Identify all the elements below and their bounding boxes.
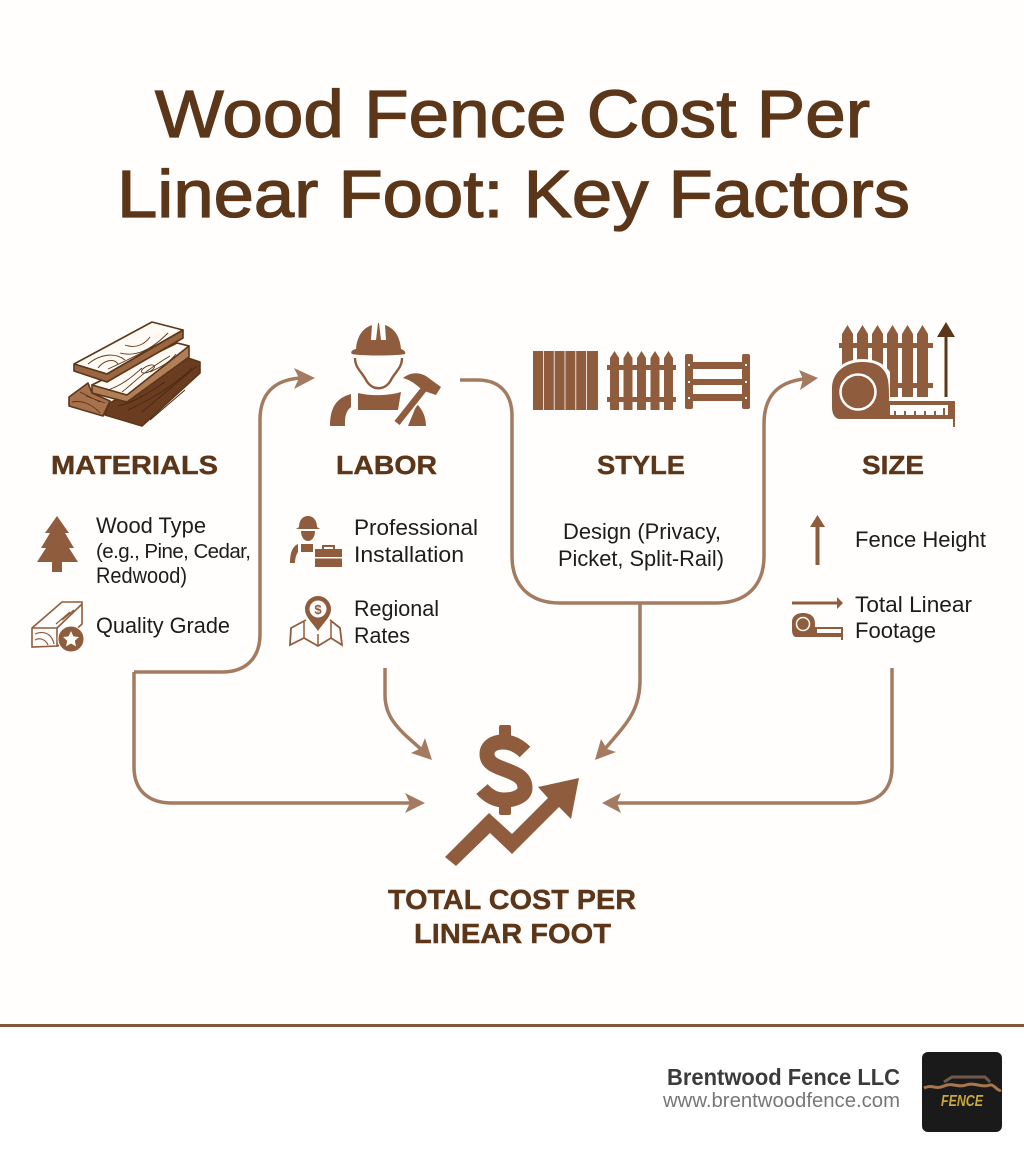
text: design: [558, 519, 724, 571]
text: wood type: Wood Type: [96, 513, 206, 538]
text: professional installation: [354, 515, 478, 567]
icon: stacked lumber: [69, 322, 200, 426]
arrow: labor to total cost: [385, 668, 432, 760]
text: total linear footage: [855, 592, 972, 643]
icon: privacy fence: [533, 351, 598, 410]
panel: total cost: [388, 725, 636, 949]
icon: linear tape arrow: [792, 597, 843, 640]
heading: labor: LABOR: [336, 450, 437, 480]
icon: pine tree: [37, 516, 78, 572]
heading: materials: MATERIALS: [51, 450, 218, 480]
icon: worker with hard hat and hammer: [330, 323, 441, 426]
title: Linear Foot: Key Factors: [117, 157, 910, 232]
logo: [922, 1052, 1002, 1132]
arrow: labor to style to size: [460, 370, 818, 603]
icon: fence with tape measure: [829, 322, 955, 427]
arrow: style to total cost: [595, 603, 640, 760]
panel: labor: [290, 323, 478, 648]
text: regional rates: [354, 596, 439, 648]
icon: map with dollar pin: [290, 596, 342, 646]
heading: size: SIZE: [862, 450, 924, 480]
title: [117, 77, 910, 232]
text: wood type: (e.g., Pine, Cedar,: [96, 540, 251, 563]
text: design: Design (Privacy,: [563, 519, 721, 544]
text: total cost per linear foot: TOTAL COST PER: [388, 884, 636, 915]
text: wood type: [96, 513, 251, 588]
icon: map with dollar pin: $: [314, 602, 322, 617]
footer: [0, 1024, 1024, 1154]
text: regional rates: Rates: [354, 623, 410, 648]
panel: materials: [32, 322, 251, 652]
icon: lumber beam with star badge: [32, 602, 84, 652]
text: professional installation: Installation: [354, 542, 464, 567]
text: design: Picket, Split-Rail): [558, 546, 724, 571]
text: quality grade: Quality Grade: [96, 613, 230, 638]
arrow: size to total cost: [602, 668, 892, 813]
text: total cost per linear foot: [388, 884, 636, 949]
heading: style: STYLE: [597, 450, 685, 480]
text: total linear footage: Total Linear: [855, 592, 972, 617]
arrow: materials to labor and total cost: [134, 368, 425, 813]
icon: height arrow: [810, 515, 825, 565]
text: fence height: Fence Height: [855, 527, 986, 552]
text: professional installation: Professional: [354, 515, 478, 540]
icon: dollar with rising arrow: [445, 725, 579, 866]
brand name: Brentwood Fence LLC: [667, 1064, 900, 1090]
panel: size: [792, 322, 986, 643]
text: wood type: Redwood): [96, 563, 187, 588]
text: total cost per linear foot: LINEAR FOOT: [414, 918, 611, 949]
text: total linear footage: Footage: [855, 618, 936, 643]
panel: style: [533, 351, 750, 571]
logo: FENCE: [941, 1093, 984, 1110]
title: Wood Fence Cost Per: [155, 77, 870, 152]
icon: split-rail fence: [685, 354, 750, 409]
website: www.brentwoodfence.com: [662, 1090, 900, 1112]
text: regional rates: Regional: [354, 596, 439, 621]
icon: worker with toolbox: [290, 516, 342, 567]
icon: picket fence: [607, 351, 676, 410]
